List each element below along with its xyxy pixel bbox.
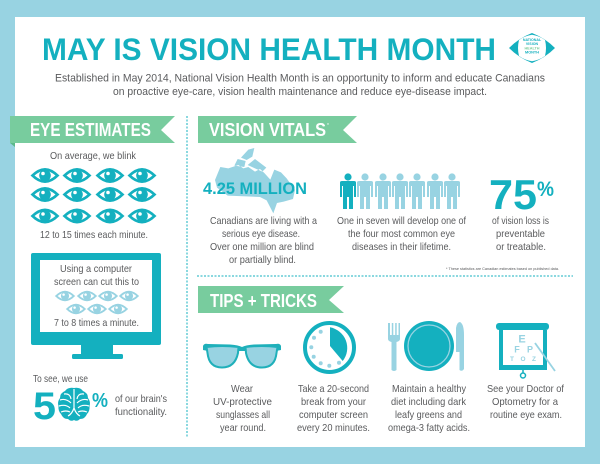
intro text: Established in May 2014, National Vision Health Month is an opportunity to inform and educate Canadians — [55, 72, 545, 84]
text: optometry tip — [487, 384, 564, 421]
ribbon: tips and tricks — [198, 286, 344, 313]
icon: eye chart — [496, 323, 555, 378]
icon: sunglasses — [203, 344, 281, 368]
text: sunglasses tip: sunglasses all — [216, 410, 270, 421]
text: computer screen — [54, 264, 139, 288]
text: diet tip: Maintain a healthy — [392, 384, 467, 395]
icon: computer monitor — [31, 253, 161, 359]
text: one in seven — [337, 216, 466, 253]
title: MAY IS VISION HEALTH MONTH — [42, 31, 496, 67]
map: canada — [215, 148, 295, 213]
icon: eye chart: P — [527, 344, 533, 354]
text: break tip: Take a 20-second — [298, 384, 369, 395]
ribbon: tips and tricks: TIPS + TRICKS — [210, 291, 317, 311]
icon: eye chart: Z — [532, 356, 536, 363]
text: blink rate: 12 to 15 times each minute. — [40, 230, 148, 241]
icon: clock — [305, 323, 354, 372]
logo: national vision health month eye: NATIONAL — [523, 38, 542, 42]
stat: 4.25 million: 4.25 MILLION — [203, 179, 307, 198]
icon: seven people — [340, 173, 460, 209]
text: sunglasses tip: UV-protective — [213, 397, 272, 408]
text: one in seven: One in seven will develop one of — [337, 216, 466, 227]
horizontal divider — [197, 275, 573, 277]
icon: eye chart: E — [518, 334, 526, 346]
ribbon: vision vitals: VISION VITALS — [209, 120, 326, 140]
icon: fork — [388, 323, 400, 371]
text: optometry tip: routine eye exam. — [490, 410, 562, 421]
stat: 50 percent with brain: % — [92, 390, 108, 412]
text: break tip: every 20 minutes. — [297, 423, 370, 434]
icon: eye chart: F — [514, 344, 520, 354]
icon: knife — [456, 322, 464, 371]
text: one in seven: diseases in their lifetime. — [352, 242, 451, 253]
text: break tip — [297, 384, 370, 434]
logo: national vision health month eye: HEALTH — [524, 46, 540, 50]
footnote: * These statistics are Canadian estimates based on published data. — [446, 267, 559, 271]
text: break tip: computer screen — [299, 410, 368, 421]
text: vision loss: of vision loss is — [492, 216, 549, 227]
text: computer screen: screen can cut this to — [54, 277, 139, 288]
text: canadians: Canadians are living with a — [210, 216, 317, 227]
text: canadians — [210, 216, 317, 266]
text: reduced blink rate: 7 to 8 times a minute. — [54, 318, 139, 329]
text: break tip: break from your — [301, 397, 367, 408]
logo: national vision health month eye — [509, 33, 555, 63]
text: sunglasses tip: Wear — [231, 384, 254, 395]
text: optometry tip: See your Doctor of — [487, 384, 564, 395]
text: canadians: or partially blind. — [229, 255, 296, 266]
icon: twelve teal eyes — [30, 168, 156, 224]
icon: eye chart: T — [510, 356, 514, 363]
vertical divider — [186, 116, 188, 437]
stat: 75 percent: % — [537, 178, 554, 201]
ribbon: vision vitals: * — [327, 123, 329, 129]
text: diet tip: omega-3 fatty acids. — [388, 423, 470, 434]
intro text — [55, 72, 545, 98]
text: vision loss: preventable — [496, 229, 545, 240]
ribbon: eye estimates: EYE ESTIMATES — [30, 120, 151, 140]
text: to see: To see, we use — [33, 374, 88, 385]
text: diet tip: leafy greens and — [395, 410, 462, 421]
text: brain functionality — [115, 394, 167, 418]
ribbon: vision vitals — [198, 116, 357, 143]
text: brain functionality: of our brain's — [115, 394, 167, 405]
text: sunglasses tip — [213, 384, 272, 434]
text: canadians: Over one million are blind — [210, 242, 314, 253]
text: canadians: serious eye disease. — [222, 229, 300, 240]
logo: national vision health month eye: MONTH — [525, 50, 539, 54]
stat: 50 percent with brain: 5 — [33, 385, 56, 428]
ribbon: eye estimates — [10, 116, 175, 147]
text: vision loss: or treatable. — [496, 242, 546, 253]
text: sunglasses tip: year round. — [220, 423, 266, 434]
text: on average: On average, we blink — [50, 151, 137, 162]
text: diet tip — [388, 384, 470, 434]
text: vision loss — [492, 216, 549, 253]
stat: 50 percent with brain — [33, 385, 108, 428]
intro text: on proactive eye-care, vision health maintenance and reduce eye-disease impact. — [113, 86, 487, 98]
logo: national vision health month eye: VISION — [526, 42, 538, 46]
text: optometry tip: Optometry for a — [492, 397, 558, 408]
text: diet tip: diet including dark — [391, 397, 467, 408]
icon: eye chart: O — [520, 356, 526, 363]
icon: seven light eyes — [55, 291, 139, 314]
text: one in seven: the four most common eye — [348, 229, 455, 240]
text: computer screen: Using a computer — [60, 264, 133, 275]
text: brain functionality: functionality. — [115, 407, 167, 418]
stat: 75 percent: 75 — [489, 171, 537, 218]
icon: plate — [404, 321, 454, 371]
